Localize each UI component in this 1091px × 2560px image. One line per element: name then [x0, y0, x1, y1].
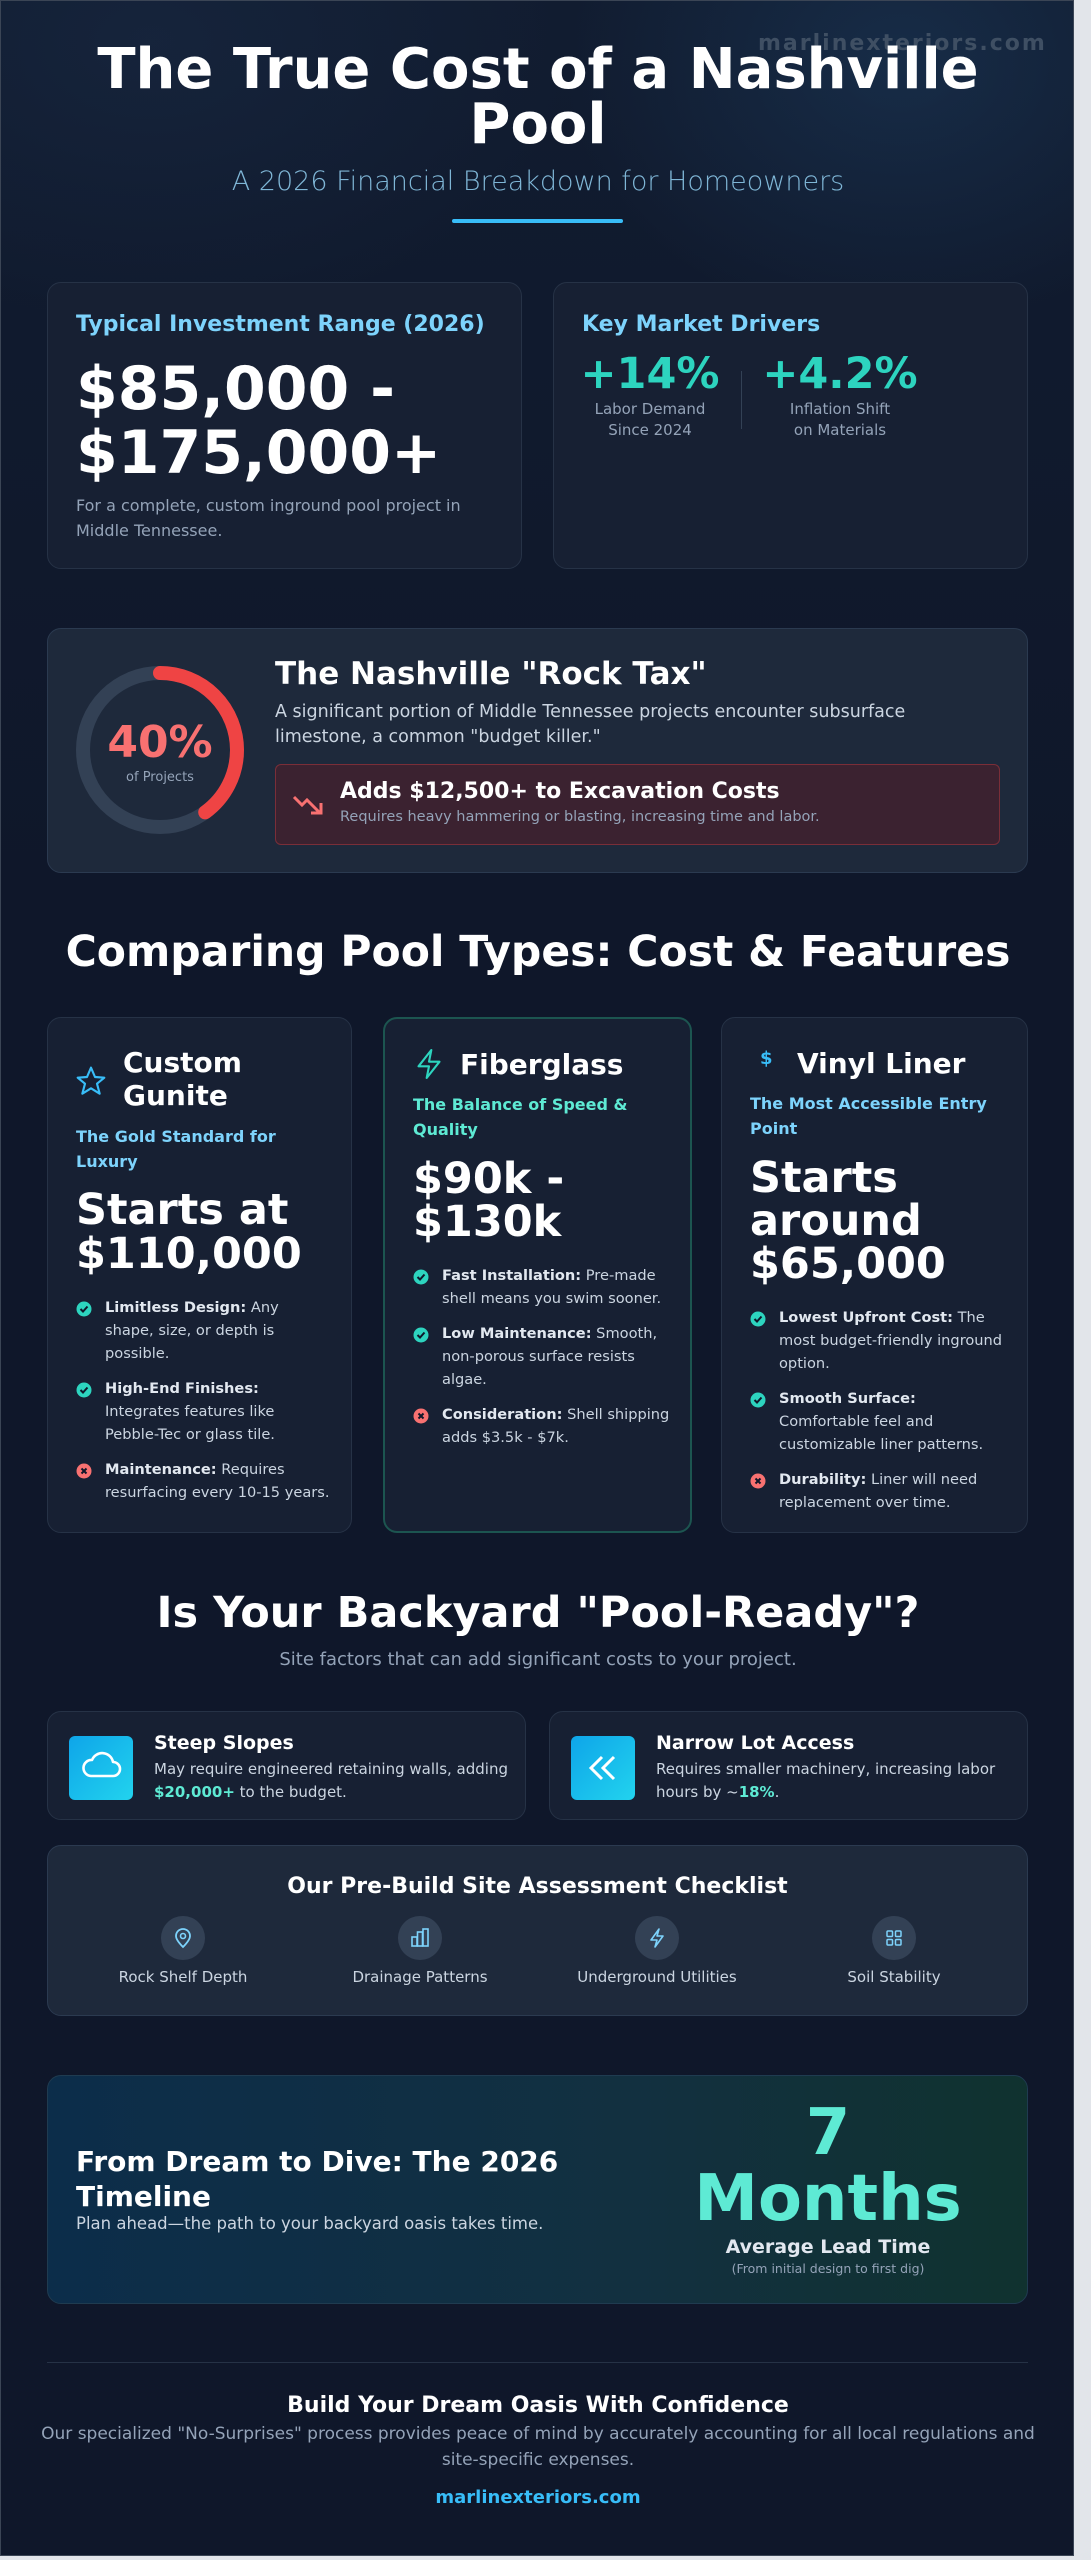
card title: Typical Investment Range (2026)	[76, 312, 485, 337]
stat: 7 months: (From initial design to first dig)	[732, 2261, 924, 2276]
item: drainage	[352, 1916, 488, 1986]
rock tax title: The Nashville "Rock Tax"	[275, 656, 707, 692]
panel: steep slopes: Steep Slopes	[154, 1732, 294, 1754]
card title: Key Market Drivers	[582, 312, 820, 337]
stat: labor: Labor Demand	[595, 400, 705, 418]
stat: 7 months: 7	[806, 2096, 850, 2170]
item: rock shelf	[119, 1916, 247, 1986]
checklist title: Our Pre-Build Site Assessment Checklist	[287, 1874, 788, 1899]
panel: fiberglass: The Balance of Speed & Quality	[413, 1095, 627, 1139]
subtitle: A 2026 Financial Breakdown for Homeowners	[232, 166, 844, 197]
icon: trending down	[293, 796, 322, 814]
panel: custom gunite: $110,000	[76, 1229, 302, 1279]
panel: fiberglass: Consideration: Shell shipping adds $3.5k - $7k.	[442, 1406, 669, 1446]
panel: fiberglass: Fast Installation: Pre-made shell means you swim sooner.	[442, 1267, 661, 1307]
callout: excavation cost: Requires heavy hammering or blasting, increasing time and labor.	[340, 809, 820, 825]
panel: fiberglass	[383, 1017, 692, 1533]
panel: fiberglass: Low Maintenance: Smooth, non-porous surface resists algae.	[442, 1325, 657, 1388]
callout: excavation cost	[275, 764, 1000, 845]
icon: cloud	[69, 1736, 133, 1800]
panel: checklist	[47, 1845, 1028, 2016]
donut chart 40%	[76, 666, 244, 834]
panel: fiberglass: $130k	[413, 1197, 561, 1247]
panel: vinyl liner: Vinyl Liner	[797, 1047, 965, 1080]
stat: inflation: Inflation Shift	[790, 400, 890, 418]
panel: custom gunite: High-End Finishes: Integrates features like Pebble-Tec or glass tile.	[105, 1380, 275, 1443]
item: drainage: Drainage Patterns	[352, 1968, 488, 1986]
item: utilities	[577, 1916, 737, 1986]
title: The True Cost of a Nashville	[97, 37, 979, 102]
stat: inflation: +4.2%	[762, 349, 918, 399]
panel: custom gunite	[47, 1017, 352, 1533]
title: Pool	[469, 92, 607, 157]
panel: steep slopes: May require engineered retaining walls, adding $20,000+ to the budget.	[154, 1760, 508, 1801]
panel: steep slopes	[47, 1711, 526, 1820]
panel: vinyl liner: The Most Accessible Entry Point	[750, 1094, 987, 1138]
panel: custom gunite: The Gold Standard for Luxury	[76, 1127, 276, 1171]
panel: vinyl liner: Smooth Surface: Comfortable feel and customizable liner patterns.	[779, 1390, 983, 1453]
item: soil	[847, 1916, 941, 1986]
panel: vinyl liner: Durability: Liner will need replacement over time.	[779, 1471, 977, 1511]
item: soil: Soil Stability	[847, 1968, 941, 1986]
timeline subtitle: Plan ahead—the path to your backyard oasis takes time.	[76, 2214, 543, 2233]
panel: market drivers	[553, 282, 1028, 569]
stat: 7 months: Average Lead Time	[726, 2236, 930, 2258]
stat: inflation: on Materials	[794, 421, 886, 439]
panel: rock tax	[47, 628, 1028, 873]
stat: labor: +14%	[581, 349, 719, 399]
stat: labor	[581, 349, 719, 439]
panel: custom gunite: Maintenance: Requires resurfacing every 10-15 years.	[105, 1461, 330, 1501]
description: For a complete, custom inground pool project in Middle Tennessee.	[76, 496, 461, 540]
watermark: marlinexteriors.com	[758, 31, 1047, 56]
heading: pool-ready: Is Your Backyard "Pool-Ready"?	[156, 1588, 920, 1638]
donut chart 40%: 40%	[107, 717, 213, 768]
donut chart 40%: of Projects	[126, 770, 194, 785]
stat: 7 months	[694, 2096, 962, 2276]
panel: vinyl liner: around	[750, 1196, 922, 1246]
panel: vinyl liner: Starts	[750, 1153, 898, 1203]
panel: custom gunite: Limitless Design: Any shape, size, or depth is possible.	[105, 1299, 279, 1362]
stat: 7 months: Months	[694, 2162, 962, 2236]
item: utilities: Underground Utilities	[577, 1968, 737, 1986]
timeline title: From Dream to Dive: The 2026 Timeline	[76, 2145, 558, 2213]
panel: custom gunite: Starts at	[76, 1185, 288, 1235]
price range: $175,000+	[76, 418, 441, 488]
panel: custom gunite: Custom	[123, 1046, 242, 1079]
heading: comparing pool types: Comparing Pool Types: Cost & Features	[66, 928, 1010, 977]
footer title: Build Your Dream Oasis With Confidence	[287, 2393, 789, 2418]
stat: inflation	[762, 349, 918, 439]
panel: narrow lot: Narrow Lot Access	[656, 1732, 854, 1754]
footer link: marlinexteriors.com	[435, 2487, 641, 2508]
panel: fiberglass: $90k -	[413, 1154, 564, 1204]
icon: chevrons	[571, 1736, 635, 1800]
panel: narrow lot: Requires smaller machinery, increasing labor hours by ~18%.	[656, 1760, 995, 1801]
item: rock shelf: Rock Shelf Depth	[119, 1968, 247, 1986]
stat: labor: Since 2024	[608, 421, 692, 439]
subheading: Site factors that can add significant costs to your project.	[279, 1649, 797, 1670]
panel: vinyl liner: $65,000	[750, 1239, 946, 1289]
price range: $85,000 -	[76, 354, 395, 424]
icon: dollar: $	[760, 1048, 773, 1069]
panel: timeline	[47, 2075, 1028, 2304]
panel: investment range	[47, 282, 522, 569]
panel: vinyl liner: Lowest Upfront Cost: The most budget-friendly inground option.	[779, 1309, 1002, 1372]
footer text: Our specialized "No-Surprises" process provides peace of mind by accurately accounting for all local regulations and site-specific expenses.	[41, 2424, 1035, 2470]
rock tax description: A significant portion of Middle Tennessee projects encounter subsurface limestone, a common "budget killer."	[275, 702, 905, 747]
icon: lightning	[417, 1049, 441, 1079]
title	[97, 37, 979, 157]
icon: star	[76, 1066, 106, 1095]
panel: vinyl liner	[721, 1017, 1028, 1533]
callout: excavation cost: Adds $12,500+ to Excavation Costs	[340, 779, 780, 804]
price range	[76, 354, 441, 488]
panel: fiberglass: Fiberglass	[460, 1048, 623, 1081]
panel: narrow lot	[549, 1711, 1028, 1820]
panel: custom gunite: Gunite	[123, 1079, 228, 1112]
